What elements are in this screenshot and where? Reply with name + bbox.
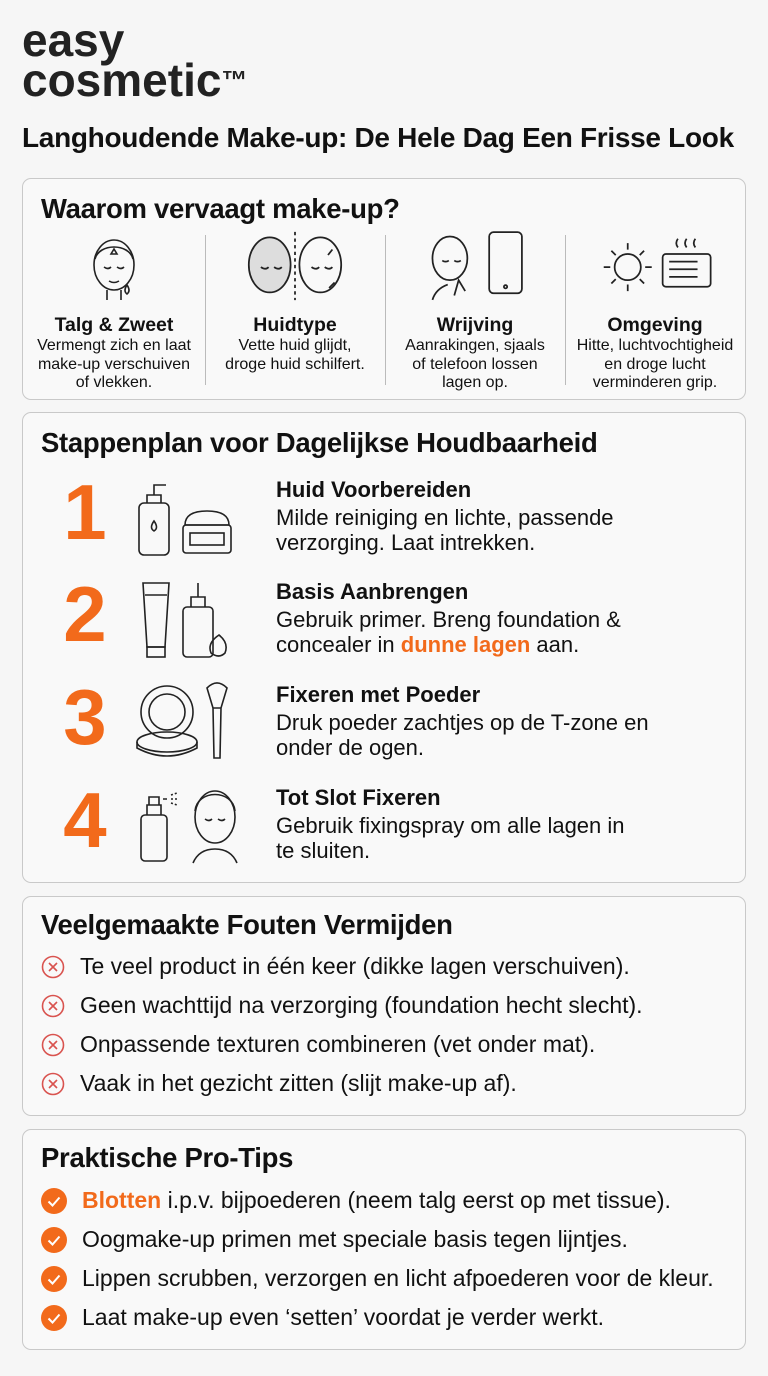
tips list: Oogmake-up primen met speciale basis tegen lijntjes. (82, 1226, 628, 1252)
heading: tips: Praktische Pro-Tips (41, 1142, 293, 1173)
heading: causes: Waarom vervaagt make-up? (41, 193, 400, 224)
step 3: 3 (63, 673, 107, 761)
cause: talg: make-up verschuiven (38, 356, 190, 372)
cause: wrijving (405, 231, 545, 391)
tips list: Laat make-up even ‘setten’ voordat je verder werkt. (82, 1304, 604, 1330)
mistake list: Geen wachttijd na verzorging (foundation hecht slecht). (80, 992, 643, 1018)
step 2: 2 (63, 570, 107, 658)
step 4: 4 (63, 776, 107, 864)
cause: huidtype: Vette huid glijdt, (239, 337, 351, 354)
step 2: Basis Aanbrengen (276, 579, 468, 604)
logo: cosmetic™ (22, 54, 247, 106)
mistake list: Te veel product in één keer (dikke lagen verschuiven). (80, 953, 630, 979)
step 4: te sluiten. (276, 838, 370, 863)
cause: talg: Vermengt zich en laat (37, 337, 191, 354)
cause: omgeving: verminderen grip. (593, 374, 717, 391)
step 4 (63, 776, 625, 864)
cause: wrijving: Wrijving (437, 314, 513, 336)
cause: omgeving: Omgeving (607, 314, 703, 336)
title: Langhoudende Make-up: De Hele Dag Een Frisse Look (22, 122, 734, 153)
step 2: Gebruik primer. Breng foundation & (276, 607, 621, 632)
heading: mistakes: Veelgemaakte Fouten Vermijden (41, 909, 453, 940)
panel: causes (22, 178, 746, 400)
step 4: Tot Slot Fixeren (276, 785, 441, 810)
cause: wrijving: Aanrakingen, sjaals (405, 337, 545, 354)
step 2 (63, 570, 621, 658)
step 4: Gebruik fixingspray om alle lagen in (276, 813, 625, 838)
cause: huidtype: Huidtype (253, 314, 337, 336)
panel: mistakes (22, 896, 746, 1116)
cause: talg: of vlekken. (76, 374, 152, 391)
heading: steps: Stappenplan voor Dagelijkse Houdbaarheid (41, 427, 597, 458)
tips list: Blotten i.p.v. bijpoederen (neem talg eerst op met tissue). (82, 1187, 671, 1213)
step 1: Huid Voorbereiden (276, 477, 471, 502)
step 1: 1 (63, 468, 107, 556)
step 3: Druk poeder zachtjes op de T-zone en (276, 710, 649, 735)
mistake list: Vaak in het gezicht zitten (slijt make-up af). (80, 1070, 517, 1096)
cause: omgeving (577, 238, 733, 391)
panel: steps (22, 412, 746, 883)
step 2: concealer in dunne lagen aan. (276, 632, 579, 657)
cause: talg: Talg & Zweet (55, 314, 173, 336)
cause: omgeving: Hitte, luchtvochtigheid (577, 337, 733, 354)
cause: wrijving: of telefoon lossen (412, 356, 538, 372)
tips list (41, 1187, 714, 1331)
step 3: onder de ogen. (276, 735, 424, 760)
logo: easy (22, 14, 124, 66)
step 3: Fixeren met Poeder (276, 682, 480, 707)
step 1: verzorging. Laat intrekken. (276, 530, 535, 555)
mistake list: Onpassende texturen combineren (vet onder mat). (80, 1031, 595, 1057)
step 1 (63, 468, 614, 556)
cause: wrijving: lagen op. (442, 374, 508, 391)
panel: tips (22, 1129, 746, 1350)
logo (22, 14, 247, 106)
cause: omgeving: en droge lucht (604, 356, 706, 372)
cause: talg (37, 239, 191, 391)
cause: huidtype: droge huid schilfert. (225, 356, 365, 372)
tips list: Lippen scrubben, verzorgen en licht afpoederen voor de kleur. (82, 1265, 714, 1291)
step 3 (63, 673, 649, 761)
mistake list (42, 953, 643, 1096)
cause: huidtype (225, 232, 365, 372)
step 1: Milde reiniging en lichte, passende (276, 505, 614, 530)
